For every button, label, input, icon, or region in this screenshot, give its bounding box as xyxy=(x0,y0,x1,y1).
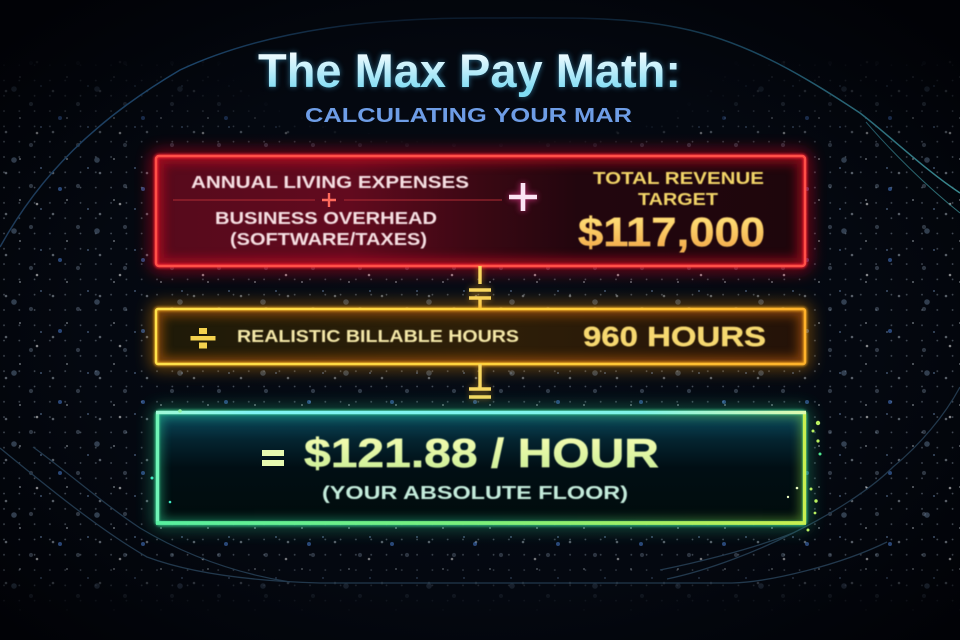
label: total revenue: TOTAL REVENUE xyxy=(593,168,764,188)
panel: hourly floor (green) xyxy=(156,412,806,524)
label: realistic billable hours: REALISTIC BILLABLE HOURS xyxy=(237,326,519,346)
divider with small plus xyxy=(173,193,502,207)
top arc lines xyxy=(0,18,960,247)
panel: revenue target (red) xyxy=(156,156,805,266)
value: 960 hours: 960 HOURS xyxy=(583,321,766,352)
value: 117000: $117,000 xyxy=(578,209,765,255)
heading: The Max Pay Math: The Max Pay Math: xyxy=(258,44,681,97)
expense line three: (SOFTWARE/TAXES) xyxy=(230,229,427,249)
bottom arc lines xyxy=(0,387,960,583)
expense line two: BUSINESS OVERHEAD xyxy=(215,208,437,228)
expense line one: ANNUAL LIVING EXPENSES xyxy=(191,172,469,192)
sparkles around green panel xyxy=(150,409,822,532)
connector: yellow to green xyxy=(469,364,491,397)
connector: red to yellow xyxy=(469,266,491,309)
label: target: TARGET xyxy=(638,189,718,209)
caption: your absolute floor: (YOUR ABSOLUTE FLOOR) xyxy=(322,482,628,503)
subtitle: CALCULATING YOUR MAR xyxy=(305,104,632,127)
title glow: The Max Pay Math: xyxy=(258,44,681,97)
icon: equals sign xyxy=(262,450,284,466)
value: hourly rate: $121.88 / HOUR xyxy=(304,430,659,476)
panel: billable hours (yellow) xyxy=(156,309,805,364)
icon: large plus xyxy=(509,183,537,211)
icon: divide sign xyxy=(190,328,216,348)
